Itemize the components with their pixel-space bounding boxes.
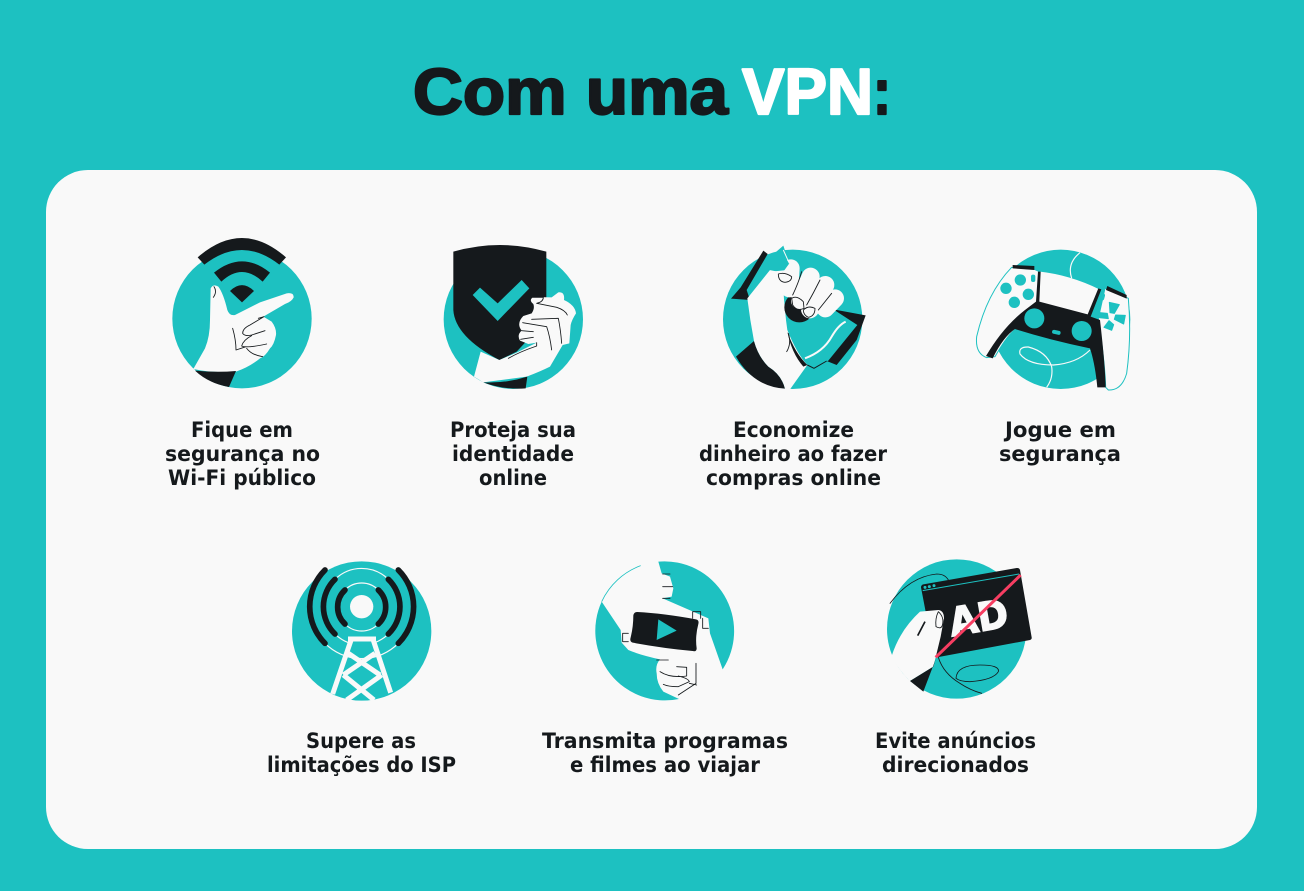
icon: game controller <box>976 250 1130 390</box>
panel: benefits card <box>46 170 1257 849</box>
title <box>413 55 891 128</box>
label: Evite anúncios direcionados: direcionados <box>882 753 1029 777</box>
label: Proteja sua identidade online: identidade <box>452 442 574 466</box>
icon: hand pointing with wifi <box>172 238 312 388</box>
label: Proteja sua identidade online: online <box>479 466 547 490</box>
label: Economize dinheiro ao fazer compras online: Economize <box>733 418 854 442</box>
icon: shield with check held by hand <box>444 245 583 389</box>
title: : <box>873 55 891 128</box>
icon: hands framing video <box>595 561 734 700</box>
text: AD: AD <box>946 591 1012 646</box>
label: Fique em segurança no Wi-Fi público: Fique em <box>191 418 293 442</box>
label: Fique em segurança no Wi-Fi público: Wi-Fi público <box>168 466 316 490</box>
label: Proteja sua identidade online <box>450 418 576 490</box>
label: Supere as limitações do ISP <box>267 729 456 777</box>
title: VPN <box>742 55 873 128</box>
label: Supere as limitações do ISP: limitações do ISP <box>267 753 456 777</box>
label: Economize dinheiro ao fazer compras online: dinheiro ao fazer <box>699 442 888 466</box>
icon: signal tower <box>292 561 431 701</box>
label: Transmita programas e filmes ao viajar: e filmes ao viajar <box>570 753 761 777</box>
label: Economize dinheiro ao fazer compras online <box>699 418 888 490</box>
label: Jogue em segurança <box>999 418 1121 466</box>
label: Transmita programas e filmes ao viajar <box>542 729 788 777</box>
label: Economize dinheiro ao fazer compras online: compras online <box>706 466 881 490</box>
label: Evite anúncios direcionados <box>875 729 1036 777</box>
label: Jogue em segurança: Jogue em <box>1003 418 1116 442</box>
title: Com uma <box>413 55 729 128</box>
icon: crossed out ad window <box>887 559 1032 699</box>
label: Evite anúncios direcionados: Evite anúncios <box>875 729 1036 753</box>
icon: fist holding money <box>723 246 866 389</box>
label: Fique em segurança no Wi-Fi público: segurança no <box>165 442 320 466</box>
label: Transmita programas e filmes ao viajar: Transmita programas <box>542 729 788 753</box>
label: Proteja sua identidade online: Proteja sua <box>450 418 576 442</box>
label: Supere as limitações do ISP: Supere as <box>306 729 416 753</box>
label: Fique em segurança no Wi-Fi público <box>165 418 320 490</box>
label: Jogue em segurança: segurança <box>999 442 1121 466</box>
